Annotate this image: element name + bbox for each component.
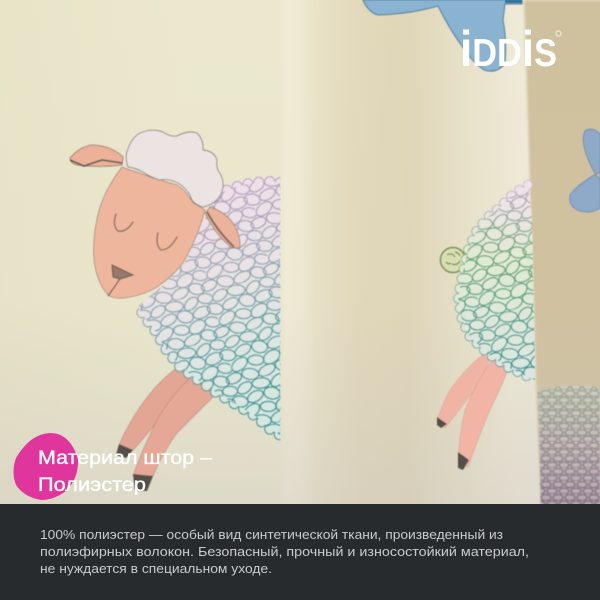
illustration: sheep left [70, 130, 285, 491]
sheep left ear [70, 145, 123, 166]
description text [40, 527, 529, 576]
description text: полиэфирных волокон. Безопасный, прочный и износостойкий материал, [40, 544, 529, 559]
heading: Полиэстер [38, 474, 146, 496]
illustration: knitted wool right [538, 386, 600, 510]
sheep right ear [205, 207, 240, 248]
sheep head [94, 167, 205, 298]
sheep wool body [450, 180, 540, 385]
sheep eyes [114, 214, 177, 250]
sheep wool body [130, 175, 285, 440]
logo: iDDiS [460, 21, 557, 77]
illustration: sheep right [437, 180, 540, 470]
description panel [0, 504, 600, 600]
sheep hair [126, 130, 223, 207]
description text: не нуждается в специальном уходе. [40, 561, 272, 576]
pink accent blob [14, 433, 78, 500]
sheep tail [440, 248, 466, 272]
description text: 100% полиэстер — особый вид синтетической ткани, произведенный из [40, 527, 503, 542]
sheep nose [108, 265, 133, 296]
sheep legs [116, 367, 215, 491]
illustration: blue star right [570, 129, 600, 212]
sheep legs [437, 355, 508, 470]
illustration: blue star top [363, 0, 522, 71]
heading [38, 447, 212, 496]
heading: Материал штор – [38, 447, 212, 469]
